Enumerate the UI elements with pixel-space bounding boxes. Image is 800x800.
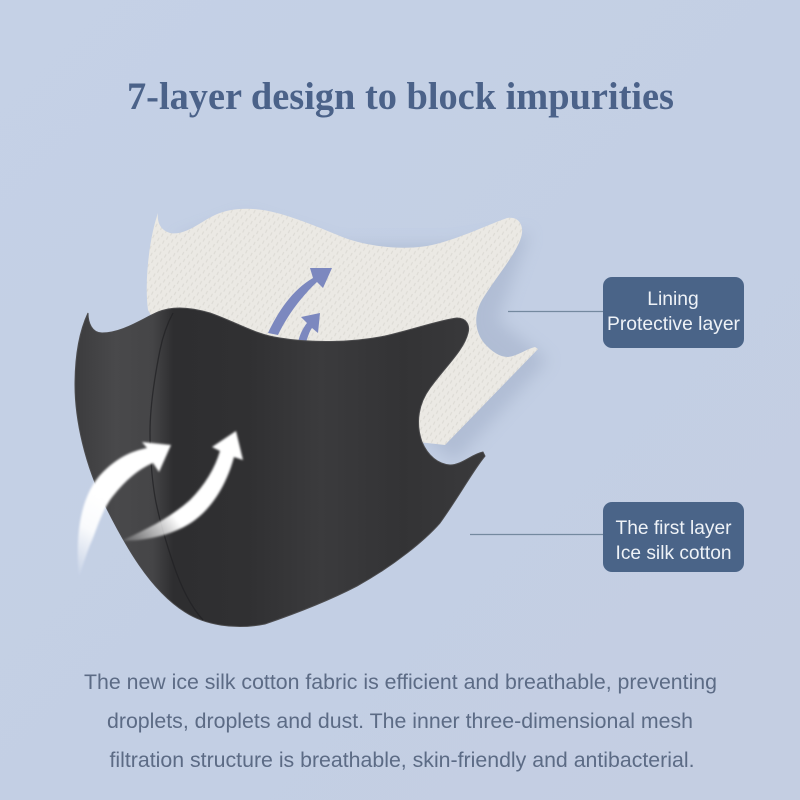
callout: lining: Lining <box>647 289 699 310</box>
description text <box>84 670 717 772</box>
mask body <box>75 308 485 627</box>
arrows: purple airflow <box>268 268 332 342</box>
leader line: first layer <box>470 534 604 536</box>
callout: lining: Protective layer <box>607 314 741 335</box>
lining shadow <box>175 215 548 462</box>
description text: filtration structure is breathable, skin-friendly and antibacterial. <box>110 748 694 772</box>
illustration: mask with lining <box>75 209 548 627</box>
arrow: white airflow right <box>121 431 243 541</box>
purple arrow small <box>298 313 320 342</box>
callout: first layer: The first layer <box>616 518 732 539</box>
callout: first layer: Ice silk cotton <box>616 543 732 564</box>
callout: lining <box>603 277 744 348</box>
title: 7-layer design to block impurities <box>127 74 674 118</box>
callout: first layer <box>603 502 744 572</box>
description text: The new ice silk cotton fabric is efficient and breathable, preventing <box>84 670 717 694</box>
arrow: white airflow left <box>78 442 171 578</box>
description text: droplets, droplets and dust. The inner three-dimensional mesh <box>107 709 693 733</box>
mask seam <box>150 313 203 620</box>
leader line: lining <box>508 310 604 312</box>
purple arrow large <box>268 268 332 335</box>
lining layer <box>147 209 538 445</box>
